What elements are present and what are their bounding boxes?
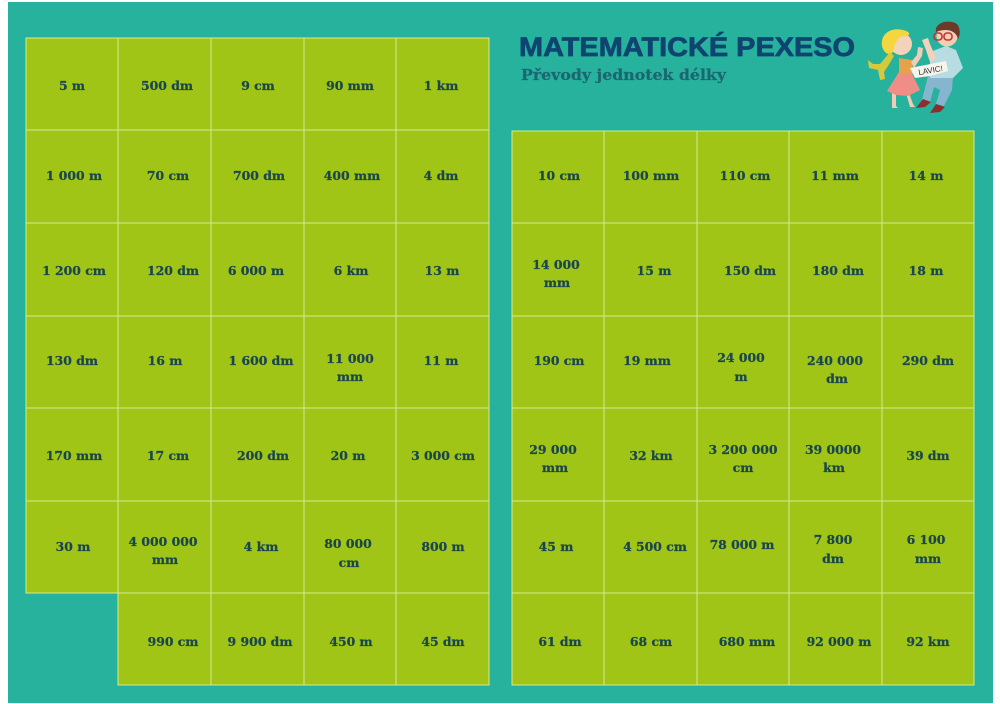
card: 14 000 mm: 14 000: [532, 257, 580, 272]
card: 20 m: 20 m: [331, 448, 365, 463]
card: 45 dm: 45 dm: [421, 634, 465, 649]
card: 92 km: [882, 593, 974, 685]
icon: girl legs: [892, 93, 915, 108]
card: 7 800 dm: 7 800: [814, 532, 853, 547]
card: 700 dm: 700 dm: [233, 168, 285, 183]
card: 14 000 mm: [512, 223, 604, 316]
card: 6 km: 6 km: [334, 263, 368, 278]
card: 4 000 000 mm: 4 000 000: [129, 534, 198, 549]
card: 180 dm: 180 dm: [812, 263, 864, 278]
card: 32 km: 32 km: [629, 448, 673, 463]
icon: boy head: [936, 26, 958, 46]
card: 24 000 m: [697, 316, 789, 408]
card: 500 dm: [118, 38, 211, 130]
card: 3 000 cm: [396, 408, 489, 501]
card: 290 dm: [882, 316, 974, 408]
card: 92 000 m: [789, 593, 882, 685]
card: 680 mm: 680 mm: [719, 634, 775, 649]
card: 1 200 cm: 1 200 cm: [42, 263, 106, 278]
card: 190 cm: [512, 316, 604, 408]
panel: right card grid: [512, 131, 974, 685]
sign text: LAVIC!: [918, 64, 944, 77]
card: 90 mm: [304, 38, 396, 130]
card: 450 m: 450 m: [329, 634, 373, 649]
card: 110 cm: 110 cm: [720, 168, 770, 183]
card: 240 000 dm: dm: [826, 371, 848, 386]
icon: boy glasses: [934, 33, 952, 40]
card: 110 cm: [697, 131, 789, 223]
card: 1 000 m: [26, 130, 118, 223]
icon: boy jeans: [922, 76, 953, 106]
card: 17 cm: 17 cm: [147, 448, 189, 463]
card: 11 000 mm: [304, 316, 396, 408]
card: 180 dm: [789, 223, 882, 316]
card: 20 m: [304, 408, 396, 501]
card: 990 cm: 990 cm: [148, 634, 198, 649]
card: 16 m: [118, 316, 211, 408]
title: MATEMATICKÉ PEXESO: [519, 31, 855, 62]
card: 68 cm: [604, 593, 697, 685]
card: 4 500 cm: [604, 501, 697, 593]
card: 400 mm: [304, 130, 396, 223]
card: 1 km: [396, 38, 489, 130]
card: 4 km: 4 km: [244, 539, 278, 554]
card: 3 200 000 cm: 3 200 000: [709, 442, 778, 457]
card: 1 600 dm: [211, 316, 304, 408]
card: 14 m: 14 m: [909, 168, 943, 183]
card: 4 500 cm: 4 500 cm: [623, 539, 687, 554]
panel: left card grid: [26, 38, 489, 685]
card: 11 000 mm: 11 000: [326, 351, 374, 366]
card: 4 dm: [396, 130, 489, 223]
card: 100 mm: [604, 131, 697, 223]
card: 120 dm: 120 dm: [147, 263, 199, 278]
card: 450 m: [304, 593, 396, 685]
card: 4 000 000 mm: [118, 501, 211, 593]
icon: boy raised arm and hand: [922, 38, 936, 62]
illustration: two children holding a paper: [868, 22, 963, 113]
card: 17 cm: [118, 408, 211, 501]
card: 13 m: [396, 223, 489, 316]
card: 100 mm: 100 mm: [623, 168, 679, 183]
icon: girl head: [890, 33, 912, 55]
card: 45 m: 45 m: [539, 539, 573, 554]
icon: boy hair: [936, 22, 960, 39]
card: 11 mm: 11 mm: [811, 168, 859, 183]
card: 3 200 000 cm: cm: [733, 460, 753, 475]
card: 15 m: 15 m: [637, 263, 671, 278]
card: 39 0000 km: [789, 408, 882, 501]
icon: girl top: [899, 58, 913, 74]
card: 70 cm: 70 cm: [147, 168, 189, 183]
card: 68 cm: 68 cm: [630, 634, 672, 649]
card: 6 100 mm: 6 100: [907, 532, 946, 547]
card: 150 dm: 150 dm: [724, 263, 776, 278]
card: 80 000 cm: cm: [339, 555, 359, 570]
card: 150 dm: [697, 223, 789, 316]
card: 80 000 cm: 80 000: [324, 536, 372, 551]
card: 30 m: [26, 501, 118, 593]
card: 80 000 cm: [304, 501, 396, 593]
card: 9 900 dm: [211, 593, 304, 685]
card: 45 m: [512, 501, 604, 593]
card: 800 m: 800 m: [421, 539, 465, 554]
icon: girl hair: [882, 29, 909, 54]
card: 500 dm: 500 dm: [141, 78, 193, 93]
card: 200 dm: 200 dm: [237, 448, 289, 463]
card: 61 dm: [512, 593, 604, 685]
card: 39 dm: [882, 408, 974, 501]
card: 39 0000 km: km: [823, 460, 845, 475]
card: 5 m: [26, 38, 118, 130]
card: 240 000 dm: [789, 316, 882, 408]
card: 78 000 m: 78 000 m: [710, 537, 774, 552]
icon: boy shoes: [916, 99, 945, 113]
card: 240 000 dm: 240 000: [807, 353, 863, 368]
card: 14 000 mm: mm: [544, 275, 570, 290]
card: 10 cm: 10 cm: [538, 168, 580, 183]
card: 19 mm: [604, 316, 697, 408]
card: 24 000 m: 24 000: [717, 350, 765, 365]
card: 5 m: 5 m: [59, 78, 85, 93]
card: 14 m: [882, 131, 974, 223]
card: 39 dm: 39 dm: [906, 448, 950, 463]
icon: girl arm: [911, 47, 923, 68]
icon: girl braid: [868, 52, 894, 80]
card: 1 600 dm: 1 600 dm: [229, 353, 293, 368]
card: 1 200 cm: [26, 223, 118, 316]
card: 10 cm: [512, 131, 604, 223]
card: 30 m: 30 m: [56, 539, 90, 554]
card: 130 dm: [26, 316, 118, 408]
card: 19 mm: 19 mm: [623, 353, 671, 368]
card: 6 000 m: 6 000 m: [228, 263, 284, 278]
card: 1 km: 1 km: [424, 78, 458, 93]
card: 90 mm: 90 mm: [326, 78, 374, 93]
card: 6 100 mm: [882, 501, 974, 593]
card: 29 000 mm: 29 000: [529, 442, 577, 457]
card: 18 m: 18 m: [909, 263, 943, 278]
card: 4 000 000 mm: mm: [152, 552, 178, 567]
card: 3 000 cm: 3 000 cm: [411, 448, 475, 463]
card: 11 mm: [789, 131, 882, 223]
card: 170 mm: [26, 408, 118, 501]
card: 200 dm: [211, 408, 304, 501]
card: 18 m: [882, 223, 974, 316]
card: 45 dm: [396, 593, 489, 685]
card: 1 000 m: 1 000 m: [46, 168, 102, 183]
card: 990 cm: [118, 593, 211, 685]
card: 11 m: [396, 316, 489, 408]
card: 7 800 dm: [789, 501, 882, 593]
icon: boy torso: [930, 46, 963, 78]
card: 11 m: 11 m: [424, 353, 458, 368]
icon: girl dress: [887, 72, 920, 96]
card: 9 cm: [211, 38, 304, 130]
card: 29 000 mm: mm: [542, 460, 568, 475]
card: 29 000 mm: [512, 408, 604, 501]
card: 4 dm: 4 dm: [424, 168, 458, 183]
card: 32 km: [604, 408, 697, 501]
card: 3 200 000 cm: [697, 408, 789, 501]
card: 130 dm: 130 dm: [46, 353, 98, 368]
card: 120 dm: [118, 223, 211, 316]
card: 9 cm: 9 cm: [241, 78, 275, 93]
card: 13 m: 13 m: [425, 263, 459, 278]
card: 24 000 m: m: [734, 369, 748, 384]
card: 290 dm: 290 dm: [902, 353, 954, 368]
card: 6 100 mm: mm: [915, 551, 941, 566]
card: 400 mm: 400 mm: [324, 168, 380, 183]
card: 92 000 m: 92 000 m: [807, 634, 871, 649]
card: 6 km: [304, 223, 396, 316]
card: 190 cm: 190 cm: [534, 353, 584, 368]
card: 39 0000 km: 39 0000: [805, 442, 861, 457]
card: 800 m: [396, 501, 489, 593]
card: 70 cm: [118, 130, 211, 223]
card: 78 000 m: [697, 501, 789, 593]
card: 6 000 m: [211, 223, 304, 316]
card: 4 km: [211, 501, 304, 593]
card: 61 dm: 61 dm: [538, 634, 582, 649]
card: 9 900 dm: 9 900 dm: [228, 634, 292, 649]
card: 15 m: [604, 223, 697, 316]
card: 170 mm: 170 mm: [46, 448, 102, 463]
card: 92 km: 92 km: [906, 634, 950, 649]
card: 11 000 mm: mm: [337, 369, 363, 384]
card: 7 800 dm: dm: [822, 551, 844, 566]
card: 16 m: 16 m: [148, 353, 182, 368]
card: 700 dm: [211, 130, 304, 223]
subtitle: Převody jednotek délky: [521, 66, 727, 84]
card: 680 mm: [697, 593, 789, 685]
